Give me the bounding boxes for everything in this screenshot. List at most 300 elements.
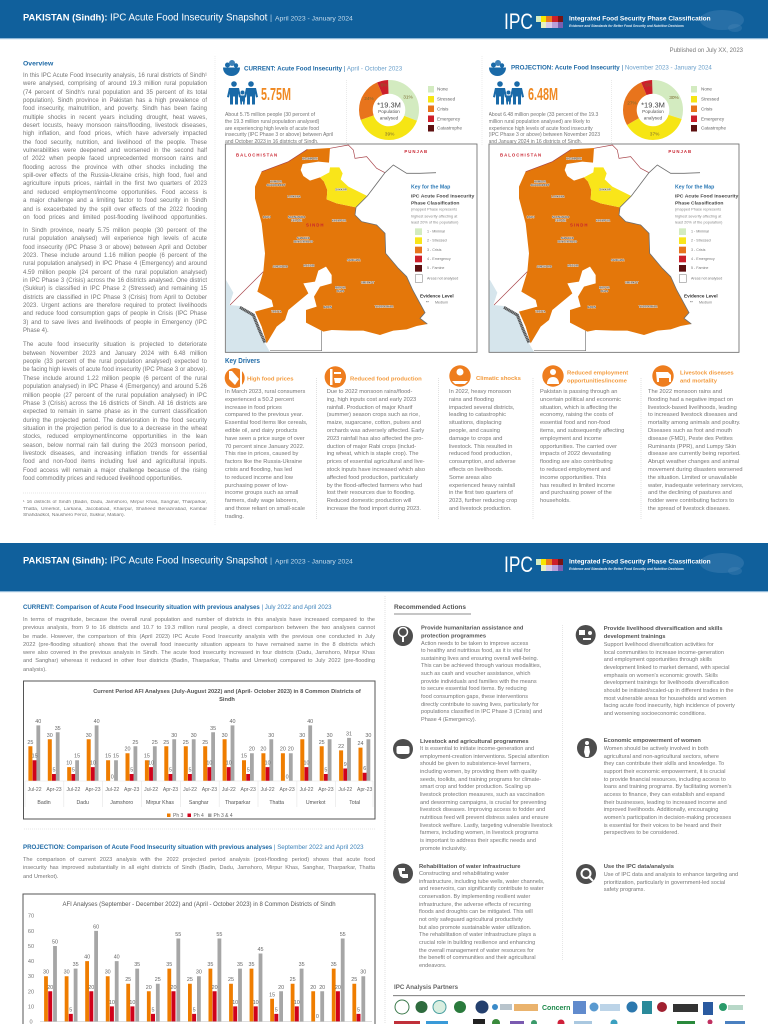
driver: high food prices: High food prices [247, 376, 294, 382]
bar chart: current period AFI analyses: 15 [74, 754, 80, 760]
icon: magnifier [576, 864, 596, 884]
driver: reduced food production: Reduced food production [350, 376, 422, 382]
action: humanitarian assistance: to secure essential food items. By reducing [421, 686, 527, 692]
bar chart: AFI analyses 2022 vs 2023: 35 [207, 962, 213, 968]
map key: 3 - Crisis [691, 248, 706, 252]
IPC logo: page 1: Integrated Food Security Phase Classification [569, 16, 711, 22]
map key: least 20% of the population) [411, 221, 459, 225]
chart legend: Ph 3 & 4 [214, 813, 233, 819]
icon: sun and land [449, 365, 471, 387]
map: current phase classification: KHAS [337, 289, 344, 293]
bar chart: AFI analyses 2022 vs 2023: 5 [152, 1007, 154, 1013]
legend: projected donut: Crisis [701, 106, 713, 112]
map: projected phase classification: THARPARKAR [639, 304, 657, 308]
action: water infrastructure: the overall management of water resources for [419, 948, 534, 954]
action: livestock and agriculture: nutritious feed will prevent distress sales and ensure [420, 815, 549, 821]
driver: climatic shocks: damage to crops and [449, 436, 502, 442]
bar chart: AFI analyses 2022 vs 2023: 30 [196, 970, 202, 976]
map: current phase classification: UMERKOT [361, 280, 375, 284]
header title: IPC Acute Food Insecurity Snapshot [110, 12, 268, 24]
driver: livestock diseases: the spread of livestock diseases. [648, 506, 730, 512]
icon: training [576, 625, 596, 645]
driver: climatic shocks: impacted several districts, [449, 405, 514, 411]
text block: overview paragraph 3: season, below normal rain fall during the 2023 monsoon period, [23, 443, 207, 449]
bar chart: AFI analyses 2022 vs 2023: 35 [73, 962, 79, 968]
action: women's empowerment: improved livelihoods. Additionally, encouraging [604, 807, 718, 813]
legend: projected donut: Catastrophe [701, 126, 726, 130]
action: livelihood diversification: development trainings for livelihoods diversification [604, 680, 729, 686]
map: projected phase classification: SHAHDADKOT [531, 183, 550, 187]
driver: reduced food production: maize, sugarcane, cotton, pulses and [327, 420, 421, 426]
bar chart: current period AFI analyses: 10 [304, 761, 310, 767]
driver: reduced food production [325, 366, 437, 524]
text block: overview paragraph 2: in IPC Phase 3 (Crisis) across the 16 districts analysed. One district [23, 278, 207, 284]
map key: 2 - Stressed [427, 239, 447, 243]
map: current phase classification: JAMSHORO [273, 265, 288, 269]
bar chart: AFI analyses 2022 vs 2023: 35 [331, 962, 337, 968]
text block: overview paragraph 3: The acute food insecurity situation is projected to deteriorate [23, 342, 207, 348]
driver: high food prices: This rise in prices, caused by [225, 451, 298, 457]
bar chart: current period AFI analyses: 15 [105, 754, 111, 760]
bar chart: current period AFI analyses: 31 [346, 731, 352, 737]
driver: reduced employment [540, 365, 640, 524]
legend: projected donut: Stressed [701, 96, 720, 102]
driver: high food prices: and those reliant on small-scale [225, 506, 305, 512]
text block: overview paragraph 3: These include around 1.22 million people (6 percent of the rural [23, 376, 207, 382]
chart: current population donut [364, 82, 414, 138]
bar chart: AFI analyses 2022 vs 2023: 0 [316, 1014, 319, 1020]
text block: overview paragraph 2: Phase 4). [23, 328, 49, 334]
text block: projection comparison: and Umerkot). [23, 874, 58, 880]
map: current phase classification: FEROZE [291, 218, 302, 222]
heading: recommended actions [394, 604, 471, 614]
action: water infrastructure: and reservoirs, can significantly contribute to water [419, 886, 544, 892]
bar chart: current period AFI analyses: 10 [90, 761, 96, 767]
text block: current comparison: previous analysis, from 9 to 16 districts and 10.7 to 19.3 million rural people, a direct comparison between the two analyses cannot [23, 625, 375, 631]
icon: price tag [225, 368, 245, 388]
driver: livestock diseases: the situation. Limited or unavailable [648, 475, 737, 481]
legend: current donut: Crisis [437, 106, 449, 112]
text block: overview paragraph 1: high inflation, and food prices, which have adversely impacted [23, 131, 207, 137]
driver: climatic shocks: Climatic shocks [476, 376, 522, 382]
bar chart: AFI analyses 2022 vs 2023: 30 [28, 974, 34, 980]
driver: reduced food production: by the flood-affected farmers who had [327, 483, 422, 489]
action: livelihood diversification: development trainings [604, 634, 666, 640]
bar chart: current period AFI analyses: Umerkot [306, 800, 326, 806]
action: women's empowerment: access to finance, they can establish and expand [604, 792, 725, 798]
text block: overview paragraph 1: on food prices and limited post-flooding livelihood opportunities. [23, 215, 207, 221]
bar chart: current period AFI analyses: 5 [169, 768, 172, 774]
bar chart: AFI analyses 2022 vs 2023: 20 [212, 985, 218, 991]
driver: high food prices: compared to the previous year. [225, 412, 303, 418]
action: livestock and agriculture: is important to address their specific needs and [420, 838, 536, 844]
driver: livestock diseases: disease are currently being reported. [648, 451, 741, 457]
bar chart: current period AFI analyses: 22 [338, 744, 344, 750]
action: water infrastructure: Rehabilitation of water infrastructure [419, 864, 521, 870]
action: use IPC data: safety programs. [604, 887, 645, 893]
driver: livestock diseases: to increased livestock diseases and [648, 412, 737, 418]
driver: livestock diseases: movement during disasters worsened [648, 467, 743, 473]
header title: PAKISTAN (Sindh): [23, 12, 108, 22]
text block: projection comparison: insecurity has improved substantially in all eight districts of Sindh (Badin, Dadu, Jamshoro, Mirpur Khas, Sanghar, Tharparkar, Thatta [23, 865, 375, 871]
panel: projected acute food insecurity [488, 60, 739, 352]
map: current phase classification: LARKANA [287, 194, 301, 198]
bar chart: AFI analyses 2022 vs 2023: 10 [28, 1004, 34, 1010]
map: projected phase classification: FEROZE [555, 218, 566, 222]
driver: high food prices: edible oil, and dairy products [225, 428, 297, 434]
text block: projection summary: (IPC Phase 3 or above) between November 2023 [488, 132, 600, 138]
text block: overview paragraph 2: (Sukkur) is classified in IPC Phase 2 (Stressed) and remaining 15 [23, 286, 207, 292]
action: water infrastructure: infrastructure, the adverse effects of recurring [419, 902, 531, 908]
map: projected phase classification: BALOCHISTAN [500, 153, 542, 158]
bar chart: AFI analyses 2022 vs 2023: 25 [228, 977, 234, 983]
text block: overview paragraph 1 [23, 72, 207, 224]
text block: current comparison: In terms of magnitude, because the overall rural population and number of districts in this analysis have increased compared to the [23, 617, 375, 623]
bar chart: AFI analyses 2022 vs 2023: 35 [248, 962, 254, 968]
driver: reduced food production: ing wheat, which is staple crop). The [327, 451, 419, 457]
map: current phase classification: MIRPUR [335, 286, 346, 290]
driver: climatic shocks: leading to catastrophic [449, 412, 506, 418]
bar chart: AFI analyses 2022 vs 2023: 40 [114, 955, 120, 961]
map key: 4 - Emergency [691, 257, 715, 261]
panel: IPC analysis partners [393, 984, 745, 1024]
driver: climatic shocks: rains and flooding [449, 397, 494, 403]
map: current phase classification: BENAZIRABAD [294, 239, 313, 243]
text block: overview paragraph 2: rural population analysed) will experience high levels of acute [23, 236, 207, 242]
partner logos: Concern [542, 1005, 570, 1012]
map key: (mapped Phase represents [411, 208, 457, 212]
chart: current population donut: 31% [403, 94, 414, 100]
driver: reduced food production: affected food production, particularly [327, 475, 418, 481]
bar chart: AFI analyses 2022 vs 2023: 55 [175, 932, 181, 938]
bar chart: current period AFI analyses: 40 [307, 719, 313, 725]
bar chart: current period AFI analyses: Total [349, 800, 360, 806]
bar chart: AFI analyses 2022 vs 2023: 20 [28, 989, 34, 995]
icon: food bowl [223, 60, 240, 76]
footnote: Shahdadkot, Naushero Feroz, Sukkur, Matiari). [23, 513, 125, 518]
bar chart: AFI analyses 2022 vs 2023: 30 [360, 970, 366, 976]
action: livelihood diversification: most vulnerable areas for households and women [604, 696, 726, 702]
map: projected phase classification: PUNJAB [668, 149, 692, 154]
bar chart: current period AFI analyses: Apr-23 [279, 787, 295, 793]
map key: 2 - Stressed [691, 239, 711, 243]
text block: overview paragraph 3 [23, 341, 207, 485]
bar chart: current period AFI analyses: 20 [249, 747, 255, 753]
map: projected phase classification: UMERKOT [625, 280, 639, 284]
driver: high food prices: crisis and flooding, has led [225, 467, 292, 473]
chart: projected population donut: 30% [669, 95, 680, 101]
text block: overview paragraph 1: and reduced employment/income opportunities. Food access is [23, 190, 207, 196]
driver: reduced employment: economy, raising the costs of [540, 412, 613, 418]
bar chart: current period AFI analyses: Mirpur Khas [146, 800, 174, 806]
driver: climatic shocks: people, and causing [449, 428, 500, 434]
bar chart: current period AFI analyses: Apr-23 [357, 787, 373, 793]
bar chart: current period AFI analyses: Apr-23 [318, 787, 334, 793]
chart: projected population donut: 27% [627, 100, 638, 106]
panel: overview [23, 60, 207, 521]
IPC logo: page 2: Integrated Food Security Phase Classification [569, 558, 711, 566]
bar chart: current period AFI analyses: Badin [37, 800, 51, 806]
action: women's empowerment [577, 738, 749, 838]
map key: IPC Acute Food Insecurity [675, 193, 739, 199]
bar chart: AFI analyses 2022 vs 2023: 5 [193, 1007, 196, 1013]
bar chart: AFI analyses 2022 vs 2023: 60 [28, 929, 34, 935]
bar chart: current period AFI analyses: Jul-22 [66, 787, 81, 793]
text block: overview paragraph 2: 3) and to save lives and livelihoods of people in Emergency (IPC [23, 320, 207, 326]
text block: overview paragraph 1: the food security, nutrition, and livelihood of the people. These [23, 140, 207, 146]
action: humanitarian assistance: populations classified in IPC Phase 3 (Crisis) and [421, 709, 542, 715]
map key: least 20% of the population) [675, 221, 723, 225]
action: humanitarian assistance: protection programmes [421, 634, 486, 640]
map: current phase classification: MATIARI [304, 264, 315, 268]
bar chart: current period AFI analyses: 20 [124, 747, 130, 753]
bar chart: current period AFI analyses: Jul-22 [144, 787, 158, 793]
header title: IPC Acute Food Insecurity Snapshot [110, 556, 268, 566]
driver: climatic shocks: In 2022, heavy monsoon [449, 389, 511, 395]
map: current phase classification: SHAHDADKOT [267, 183, 286, 187]
heading: projection comparison: PROJECTION: Comparison of Acute Food Insecurity situation with previous analyses | September 2022 and April 2023 [23, 844, 364, 851]
bar chart: current period AFI analyses: 30 [327, 733, 333, 739]
bar chart: AFI analyses 2022 vs 2023: 25 [351, 977, 357, 983]
chart: projected population donut: 37% [650, 132, 660, 138]
driver: livestock diseases: and the declining of pastures and [648, 490, 732, 496]
driver: reduced employment: has resulted in limited income [540, 483, 615, 489]
icon: cow [652, 365, 674, 387]
map: current phase classification: KHAIRPUR [332, 218, 346, 222]
map: current phase classification: DADU [263, 215, 271, 219]
action: water infrastructure: floods and droughts can be mitigated. This will [419, 909, 533, 915]
bar chart: current period AFI analyses: 25 [163, 740, 169, 746]
action: humanitarian assistance: Provide humanitarian assistance and [421, 626, 524, 632]
bar chart: current period AFI analyses: 30 [365, 733, 371, 739]
action: women's empowerment: women's participation in decision-making processes [604, 815, 731, 821]
driver: reduced food production: prices of essential agricultural and live- [327, 459, 425, 465]
footnote [23, 500, 207, 521]
driver: reduced food production: orchards was adversely affected. Early [327, 428, 424, 434]
map key: (mapped Phase represents [675, 208, 721, 212]
map key: ** [426, 300, 429, 304]
text block: overview paragraph 1: were analysed, comprising of around 19.3 million rural population [23, 81, 207, 87]
bar chart: AFI analyses 2022 vs 2023: 10 [129, 1000, 135, 1006]
driver: climatic shocks: in the first two quarters of [449, 490, 513, 496]
map key: highest severity affecting at [675, 214, 722, 218]
header band: page 2 [0, 543, 768, 592]
text block: projection summary: About 6.48 million people (33 percent of the 19.3 [488, 112, 598, 118]
map: current phase classification: SINDH [306, 223, 324, 228]
map: current phase classification: KASHMORE [302, 156, 318, 160]
bar chart: current period AFI analyses: 9 [344, 762, 347, 768]
bar chart: current period AFI analyses: Jul-22 [300, 787, 314, 793]
action: livelihood diversification: and employment opportunities through skills [604, 657, 712, 663]
action: women's empowerment: loans and training programs. By facilitating women's [604, 784, 731, 790]
driver: livestock diseases: Livestock diseases [680, 370, 734, 376]
action: livelihood diversification [576, 625, 749, 720]
bar chart: AFI analyses 2022 vs 2023: 35 [299, 962, 305, 968]
action: livelihood diversification: should be initiated/scaled-up in different trades in the [604, 688, 733, 694]
bar chart: AFI analyses 2022 vs 2023: 40 [84, 955, 90, 961]
action: water infrastructure [393, 864, 560, 973]
figure: 6.48M: 6.48M [528, 85, 558, 105]
bar chart: current period AFI analyses: Apr-23 [241, 787, 256, 793]
action: livestock and agriculture: smart crop and fodder production. Scaling up [420, 784, 531, 790]
map key [675, 185, 739, 304]
bar chart: current period AFI analyses: 30 [268, 733, 274, 739]
bar chart: current period AFI analyses: Jul-22 [28, 787, 42, 793]
driver: high food prices: increase in food prices [225, 405, 282, 411]
map key: IPC Acute Food Insecurity [411, 193, 475, 199]
bar chart: current period AFI analyses: 25 [183, 740, 189, 746]
map key: ** [690, 300, 693, 304]
bar chart: AFI analyses 2022 vs 2023: 10 [253, 1000, 259, 1006]
bar chart: current period AFI analyses: 0 [286, 774, 289, 780]
chart: current population donut: Population [378, 109, 400, 114]
map: current phase classification [225, 144, 477, 352]
icon: people [493, 81, 524, 104]
map key [411, 185, 475, 304]
driver: climatic shocks: 2023, further reducing crop [449, 498, 517, 504]
driver: high food prices: have seen a price surge of over [225, 436, 305, 442]
bar chart: AFI analyses 2022 vs 2023: 35 [237, 962, 243, 968]
action: use IPC data: prioritization, particularly in government-led social [604, 880, 725, 886]
bar chart: AFI analyses 2022 vs 2023: 45 [258, 947, 264, 953]
text block: overview paragraph 3: population analysed) in IPC Phase 4 (Emergency) and around 5.26 [23, 384, 207, 390]
chart: current population donut: 6% [381, 82, 388, 88]
text block: current comparison: 2022 (pre-flooding situation) shows that the overall food insecurity situation appears to have remained same in the 8 districts which [23, 642, 375, 648]
action: livelihood diversification: development linked to market demand, with special [604, 665, 729, 671]
text block: projection summary: million rural population analysed) are likely to [488, 119, 590, 125]
map: current phase classification: BADIN [323, 305, 332, 309]
driver: reduced food production: duction of major Rabi crops (includ- [327, 444, 416, 450]
action: women's empowerment: they can contribute their skills and knowledge. To [604, 761, 724, 767]
bar chart: current period AFI analyses: 5 [130, 768, 133, 774]
published date: Published on July XX, 2023 [670, 48, 744, 54]
action: water infrastructure: infrastructure, including tube wells, water channels, [419, 879, 544, 885]
chart legend [167, 813, 233, 819]
bar chart: AFI analyses 2022 vs 2023: 5 [357, 1007, 360, 1013]
bar chart: current period AFI analyses: 6 [363, 766, 366, 772]
legend: current donut: Stressed [437, 96, 456, 102]
action: women's empowerment: is essential for their voices to be heard and their [604, 823, 721, 829]
bar chart: current period AFI analyses: Sindh [219, 697, 235, 703]
map: projected phase classification: LARKANA [551, 194, 565, 198]
driver: reduced employment: Reduced employment [567, 370, 628, 376]
text block: overview paragraph 2 [23, 227, 207, 337]
text block: overview paragraph 1: of 2022 when people faced unprecedented monsoon rains and [23, 156, 207, 162]
text block: overview paragraph 3: Phase 3 (Crisis) across the 16 districts of Sindh. All 16 districts are [23, 401, 207, 407]
section: projection comparison [23, 844, 375, 882]
bar chart: AFI analyses 2022 vs 2023: 25 [187, 977, 193, 983]
bar chart: current period AFI analyses: 10 [66, 761, 72, 767]
action: livestock and agriculture: livestock diseases. Improving access to fodder and [420, 807, 545, 813]
text block: projection summary [488, 112, 610, 148]
text block: overview paragraph 2: 2023. Urgent actions are therefore required to protect livelihoods [23, 303, 207, 309]
driver: livestock diseases: fodder were contributing factors to [648, 498, 734, 504]
IPC logo: page 2: IPC [504, 552, 533, 577]
chart: current population donut: 39% [385, 132, 395, 138]
bar chart: current period AFI analyses: 30 [299, 733, 305, 739]
bar chart: current period AFI analyses: 25 [202, 740, 208, 746]
text block: current summary: are experiencing high levels of acute food [225, 126, 319, 132]
chart: current population donut: 24% [364, 96, 375, 102]
text block: projection summary: and January 2024 in 16 districts of Sindh. [488, 139, 582, 145]
driver: livestock diseases: and mortality [680, 378, 718, 384]
text block: overview paragraph 3: stocks, reduced employment/income opportunities in the lean [23, 434, 207, 440]
bar chart: AFI analyses 2022 vs 2023: 60 [93, 924, 99, 930]
action: women's empowerment: their businesses, leading to increased income and [604, 800, 727, 806]
driver: livestock diseases: water, inadequate veterinary services, [648, 483, 743, 489]
chart: projected population donut [627, 82, 680, 138]
driver: climatic shocks: and livestock production. [449, 506, 512, 512]
bar chart: current period AFI analyses: 40 [35, 719, 41, 725]
bar chart: current period AFI analyses: Tharparkar [225, 800, 251, 806]
bar chart: current period AFI analyses: Jul-22 [338, 787, 352, 793]
driver: reduced employment: essential food and non-food [540, 420, 610, 426]
driver: reduced employment: opportunities. The carried over [540, 444, 617, 450]
map: projected phase classification: KHAS [601, 289, 608, 293]
bar chart: current period AFI analyses: 40 [94, 719, 100, 725]
bar chart: current period AFI analyses: 30 [86, 733, 92, 739]
text block: overview paragraph 2: districts are classified in IPC Phase 3 (Crisis) from April to October [23, 295, 207, 301]
text block: overview paragraph 3: between November 2023 and January 2024 with 6.48 million [23, 351, 207, 357]
map key: 3 - Crisis [427, 248, 442, 252]
map: current phase classification: KAMBAR [270, 180, 282, 184]
bar chart: current period AFI analyses: Apr-23 [46, 787, 62, 793]
action: livestock and agriculture: should be given to subsistence-level farmers, [420, 761, 531, 767]
text block: overview paragraph 1: flooding across the province with other shocks including the [23, 165, 207, 171]
bar chart: current period AFI analyses: 5 [72, 768, 75, 774]
bar chart: AFI analyses 2022 vs 2023: 55 [216, 932, 222, 938]
map: projected phase classification: BADIN [587, 305, 596, 309]
bar chart: current period AFI analyses: 30 [222, 733, 228, 739]
action: livelihood diversification: local communities to increase income-generation [604, 650, 724, 656]
partner logos [394, 1000, 745, 1024]
map: projected phase classification: SUKKUR [599, 187, 611, 191]
icon: water tap [393, 864, 413, 884]
heading: key drivers: Key Drivers [225, 356, 260, 365]
text block: projection comparison: The comparison of current 2023 analysis with the 2022 projected period analysis (post-flooding period) shows that acute food [23, 857, 375, 863]
text block: projection summary: experience high levels of acute food insecurity [488, 126, 593, 132]
driver: climatic shocks: reduced food production, [449, 451, 512, 457]
text block: current summary: About 5.75 million people (30 percent of [225, 112, 315, 118]
legend: current donut: None [437, 86, 448, 92]
bar chart: current period AFI analyses: 35 [210, 726, 216, 732]
bar chart: AFI analyses 2022 vs 2023: 50 [28, 944, 34, 950]
bar chart: AFI analyses 2022 vs 2023: 10 [294, 1000, 300, 1006]
text block: overview paragraph 2: rural population analysed) in IPC Phase 4 (Emergency) and around [23, 261, 207, 267]
bar chart: current period AFI analyses: 30 [191, 733, 197, 739]
header title: | [270, 556, 272, 566]
IPC logo: page 1 [504, 9, 744, 34]
bar chart: AFI analyses 2022 vs 2023: 35 [134, 962, 140, 968]
map: projected phase classification: BENAZIRABAD [558, 239, 577, 243]
driver: reduced food production: rainfall. Production of major Kharif [327, 405, 412, 411]
text block: overview paragraph 1: multiple shocks in recent years including drought, heat waves, [23, 115, 207, 121]
bar chart: current period AFI analyses: 25 [152, 740, 158, 746]
bar chart: current period AFI analyses: Apr-23 [85, 787, 101, 793]
bar chart: current period AFI analyses: Jul-22 [105, 787, 119, 793]
map: projected phase classification: JAMSHORO [537, 265, 552, 269]
text block: overview paragraph 2: and reduce food consumption gaps of people in Crisis (IPC Phase [23, 311, 207, 317]
icon: people [227, 81, 258, 104]
map: projected phase classification: KAMBAR [534, 180, 546, 184]
text block: current comparison: be made. However, the comparison of this (April 2023) IPC Acute Food Insecurity analysis with the previous one conducted in July [23, 634, 375, 640]
action: water infrastructure: not only safeguard agricultural productivity [419, 917, 523, 923]
bar chart: AFI analyses 2022 vs 2023: 20 [170, 985, 176, 991]
action: women's empowerment: support their economic empowerment, it is crucial [604, 769, 725, 775]
bar chart: current period AFI analyses: Apr-23 [124, 787, 140, 793]
header title: PAKISTAN (Sindh): [23, 554, 108, 566]
chart legend: Ph 4 [194, 813, 204, 819]
